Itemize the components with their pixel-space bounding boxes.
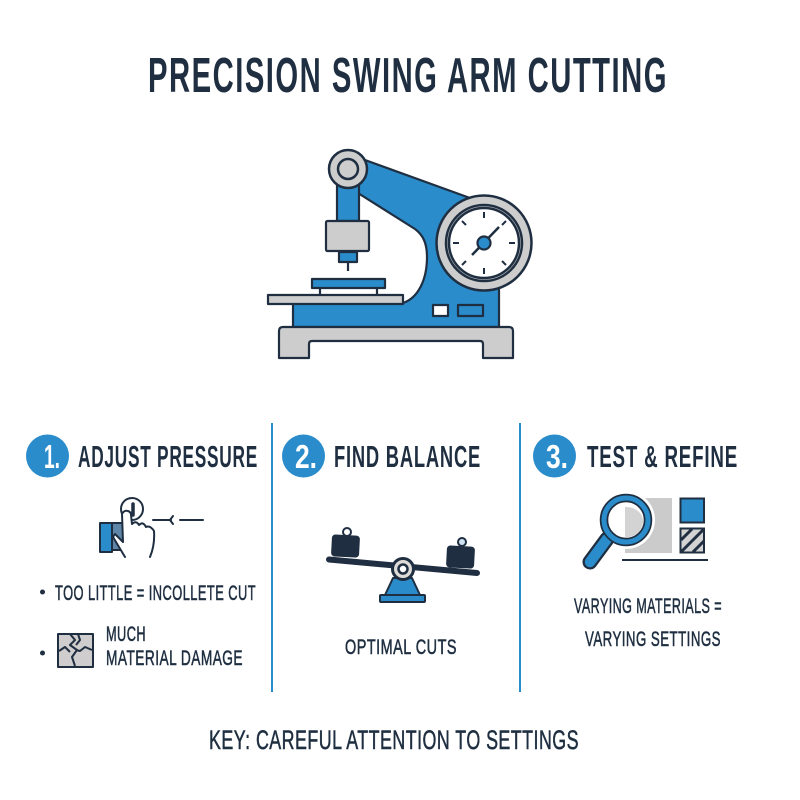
step badge 2: 2. (295, 438, 317, 475)
machine body and arm (293, 160, 499, 327)
heading: ADJUST PRESSURE (78, 439, 258, 474)
divider (271, 423, 273, 692)
icon: cracked material (58, 634, 93, 667)
panel: find balance (282, 434, 481, 659)
icon: hand pressing button (100, 498, 203, 557)
panel: adjust pressure (26, 434, 258, 670)
bullet: too little: TOO LITTLE = INCOLLETE CUT (55, 582, 256, 605)
step badge 1 (26, 434, 69, 478)
control buttons (433, 305, 483, 316)
bullet: too much (40, 623, 243, 670)
key takeaway: KEY: CAREFUL ATTENTION TO SETTINGS (209, 725, 579, 755)
step badge 2 (282, 434, 325, 478)
pressure gauge (436, 196, 532, 290)
icon: balance seesaw (329, 528, 477, 602)
step badge 3: 3. (546, 438, 568, 475)
heading: FIND BALANCE (334, 439, 481, 474)
table (268, 295, 403, 304)
panel: test and refine (533, 434, 738, 651)
machine base (279, 327, 513, 358)
divider (519, 423, 521, 692)
caption: OPTIMAL CUTS (345, 636, 457, 659)
illustration: swing arm cutting machine (268, 150, 532, 358)
column (337, 180, 359, 221)
pivot wheel (329, 150, 367, 188)
caption (574, 595, 722, 651)
work plate (312, 279, 385, 295)
caption: VARYING SETTINGS (585, 628, 721, 651)
bullet: too much: MUCH (106, 623, 146, 646)
step badge 1: 1. (44, 438, 60, 475)
cutting head (326, 221, 369, 271)
bullet: too much: MATERIAL DAMAGE (106, 647, 243, 670)
bullet: too little (40, 582, 256, 605)
icon: magnifier and material samples (590, 491, 708, 562)
step badge 3 (533, 434, 576, 478)
